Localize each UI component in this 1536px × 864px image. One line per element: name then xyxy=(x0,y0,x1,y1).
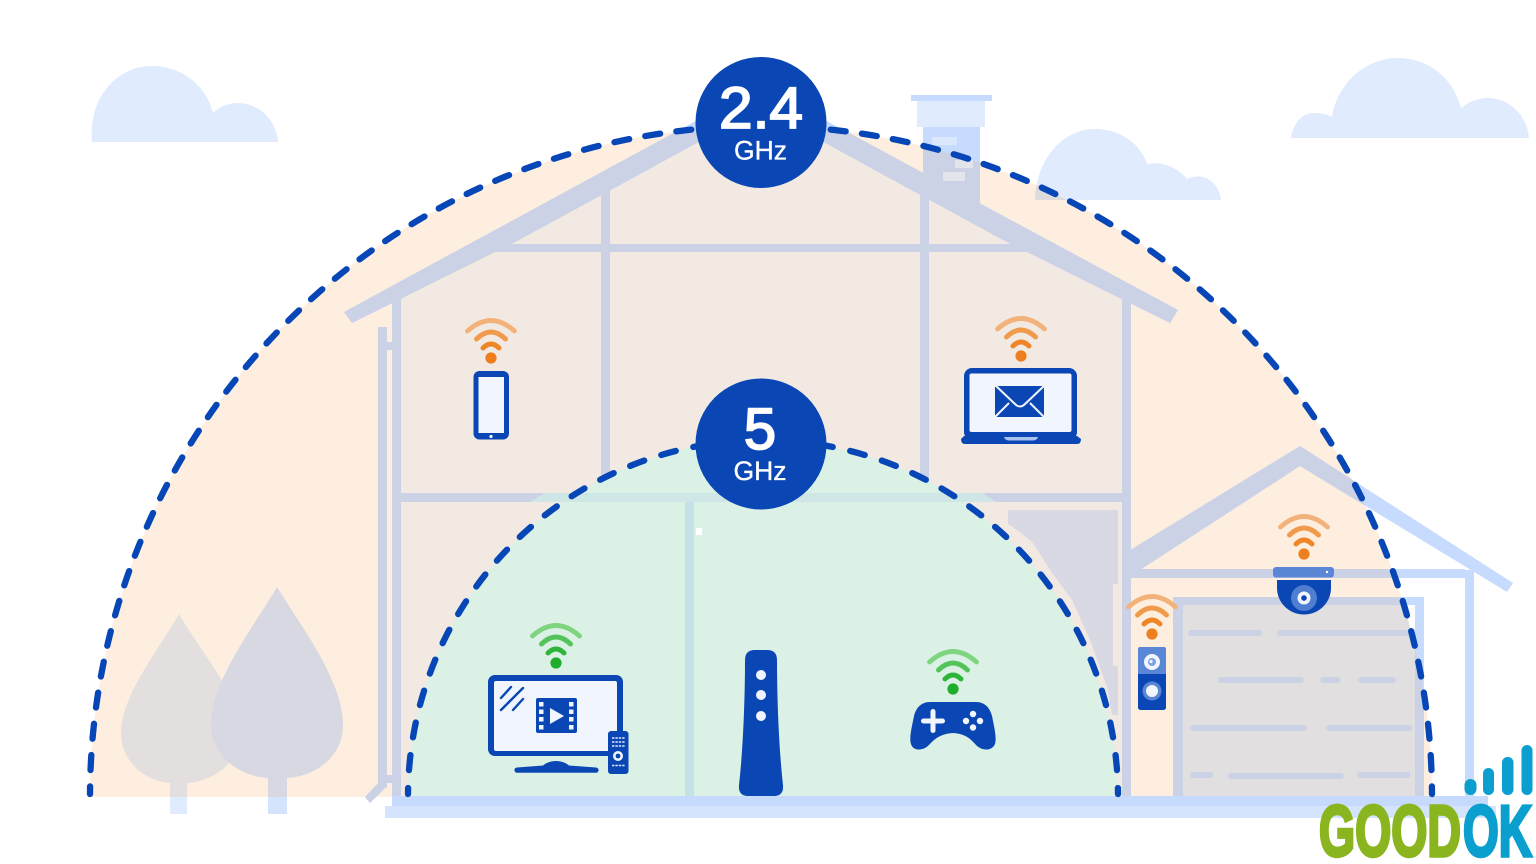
laptop notch xyxy=(1004,437,1038,440)
cloud: left xyxy=(92,66,278,142)
doorbell body xyxy=(1138,647,1166,710)
wifi signal xyxy=(1128,596,1176,640)
chimney collar xyxy=(917,101,985,127)
camera lens xyxy=(1291,585,1317,611)
tree: large trunk base xyxy=(268,797,287,814)
TV stand xyxy=(514,761,599,773)
camera mount xyxy=(1273,567,1334,578)
badge: 5 GHz xyxy=(696,378,826,510)
2.4 GHz coverage dome fill xyxy=(90,126,1432,797)
logo: GOODOK xyxy=(1319,745,1532,864)
wifi signal xyxy=(532,626,580,669)
wifi signal xyxy=(1280,516,1328,560)
house structure xyxy=(344,85,1513,803)
doorbell lens xyxy=(1144,654,1160,670)
garage door fill xyxy=(1183,605,1417,797)
trees xyxy=(121,587,343,814)
cloud: right xyxy=(1291,58,1529,138)
tree: small xyxy=(121,614,240,797)
ground upper strip xyxy=(392,796,1488,806)
house frame outside dome xyxy=(344,85,1513,803)
clouds xyxy=(92,58,1529,200)
garage door lines xyxy=(1188,630,1412,779)
tree: large xyxy=(211,587,343,797)
device: game controller xyxy=(910,652,996,750)
wifi signal xyxy=(468,320,514,364)
panel edge strip xyxy=(1113,584,1118,666)
cloud: middle xyxy=(1035,129,1221,200)
wifi signal xyxy=(998,318,1044,362)
TV glare xyxy=(501,687,523,710)
phone screen xyxy=(478,377,504,433)
house frame inside dome xyxy=(344,129,1424,803)
laptop base xyxy=(961,436,1081,444)
badge: 5 GHz: GHz xyxy=(734,456,786,486)
badge: 2.4 GHz: GHz xyxy=(734,136,787,166)
chimney bricks xyxy=(932,137,973,181)
ground xyxy=(385,796,1496,818)
remote control xyxy=(608,731,628,774)
laptop screen xyxy=(970,374,1072,432)
controller buttons xyxy=(963,711,983,731)
wifi signal xyxy=(930,652,976,695)
device: laptop xyxy=(961,318,1081,444)
envelope xyxy=(994,385,1045,418)
device: router xyxy=(739,650,783,796)
phone button xyxy=(489,435,493,438)
device: doorbell xyxy=(1128,596,1176,710)
camera dome xyxy=(1277,580,1331,614)
device: TV xyxy=(488,626,628,774)
doorbell button xyxy=(1142,682,1162,700)
house interior xyxy=(397,100,1126,797)
controller body xyxy=(910,702,996,750)
phone body xyxy=(474,371,509,440)
TV body xyxy=(488,675,623,756)
badge: 5 GHz: 5 xyxy=(744,397,776,462)
controller d-pad xyxy=(924,712,942,730)
5 GHz dashed arc xyxy=(408,440,1118,794)
device: phone xyxy=(468,320,514,440)
film icon xyxy=(536,698,577,733)
ground lower strip xyxy=(385,806,1496,818)
badge: 2.4 GHz: 2.4 xyxy=(719,76,803,141)
interior grey panel xyxy=(1008,510,1118,715)
badge: 2.4 GHz xyxy=(696,57,826,188)
TV screen xyxy=(494,681,617,751)
laptop lid xyxy=(964,368,1077,440)
device: security camera xyxy=(1273,516,1334,614)
interior walls within 5 GHz zone xyxy=(530,493,996,797)
2.4 GHz dashed arc xyxy=(90,126,1432,794)
tree: small trunk base xyxy=(170,797,187,814)
doorbell camera panel xyxy=(1138,647,1166,674)
5 GHz coverage dome fill xyxy=(408,440,1118,797)
logo signal bars xyxy=(1464,745,1532,795)
